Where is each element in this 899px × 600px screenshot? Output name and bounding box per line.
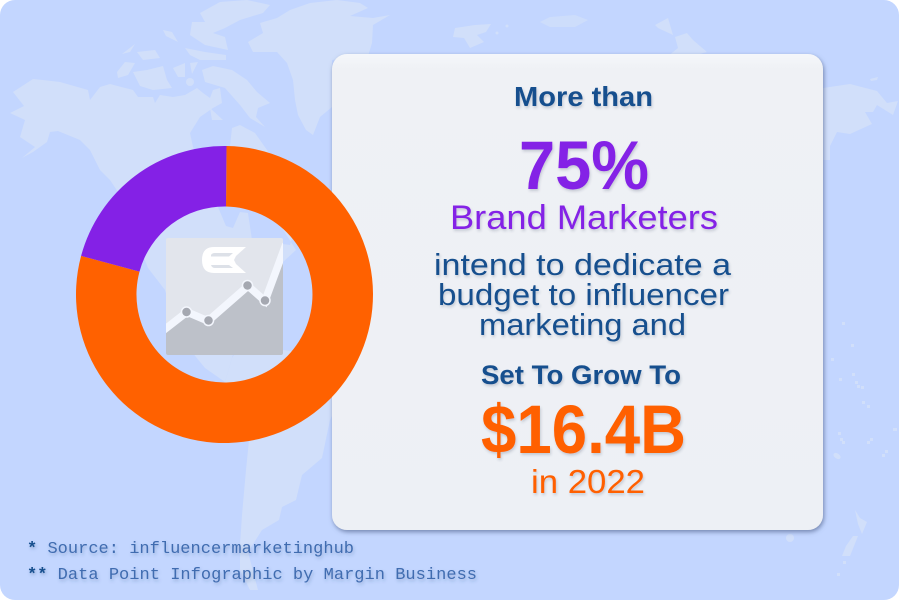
Arctic islands [117, 0, 270, 90]
footnotes [27, 540, 477, 585]
card background [332, 54, 823, 530]
Scandinavia fragments [655, 18, 707, 56]
Greenland [248, 0, 390, 135]
body text: marketing and [479, 307, 686, 342]
segment: purple [81, 146, 226, 272]
logo tile with line chart [160, 238, 286, 355]
heading: Set To Grow To: Set To Grow To [481, 360, 681, 390]
chart line [160, 244, 286, 333]
donut chart [76, 146, 373, 443]
tile background [166, 238, 283, 355]
label: in 2022: in 2022 [531, 463, 645, 500]
big stat: 75%: 75% [519, 127, 649, 204]
segment: orange 75% [76, 146, 373, 443]
Svalbard [540, 15, 588, 27]
New Zealand [842, 510, 867, 556]
chart points [182, 280, 270, 326]
label: Brand Marketers: Brand Marketers [450, 199, 718, 237]
main text card [332, 54, 823, 530]
chart area [166, 250, 283, 355]
body text: intend to dedicate a [434, 247, 732, 282]
Central and South America [225, 345, 340, 590]
small Pacific islands [831, 322, 897, 576]
body text [434, 247, 732, 342]
Russia / East Asia [823, 84, 898, 160]
credit note: ** Data Point Infographic by Margin Business [27, 566, 477, 585]
Iceland [453, 24, 491, 48]
source note: * Source: influencermarketinghub [27, 540, 354, 559]
body text: budget to influencer [438, 277, 729, 312]
big stat: $16.4B: $16.4B [481, 391, 686, 468]
heading: More than: More than [514, 81, 653, 112]
North America [10, 79, 296, 382]
icon: brand logo [202, 247, 246, 273]
